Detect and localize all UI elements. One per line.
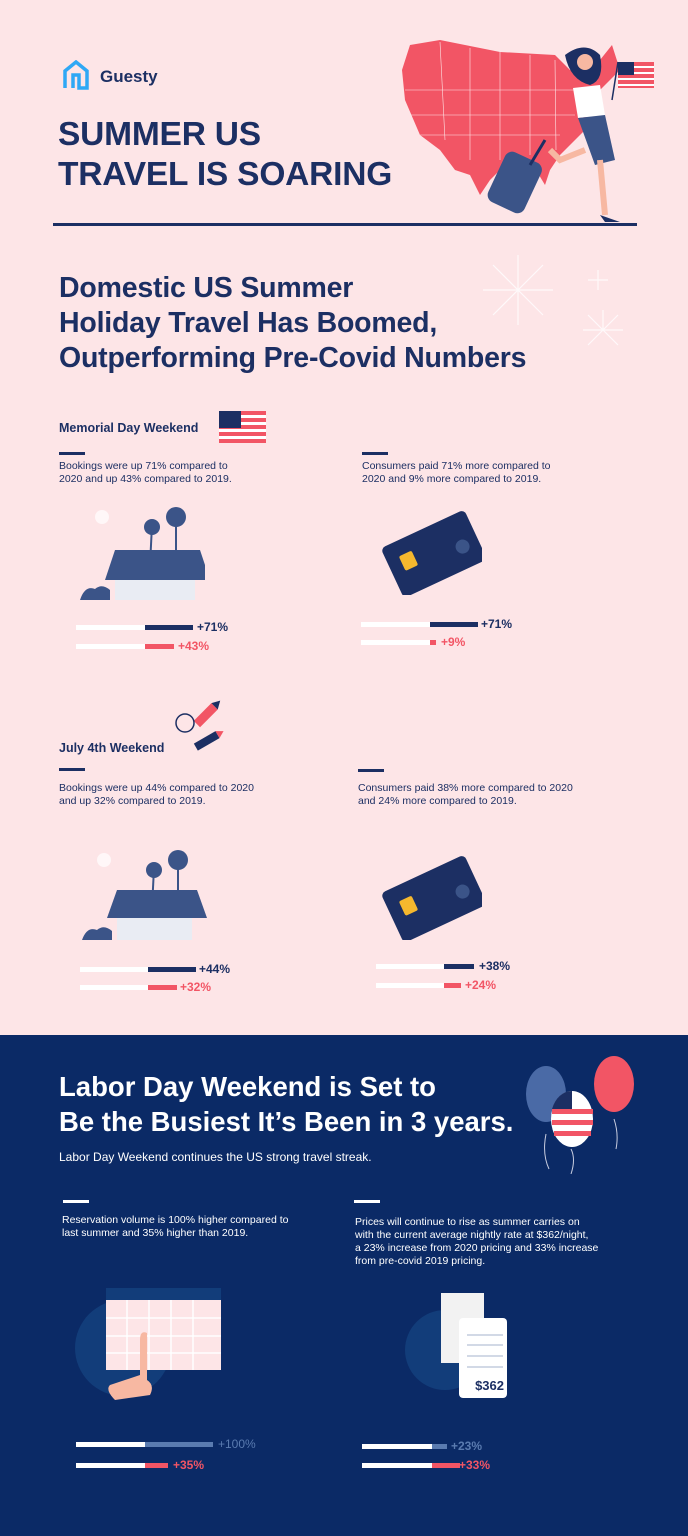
memorial text right: 2020 and 9% more compared to 2019. — [362, 473, 541, 485]
icon: US flag — [219, 411, 266, 443]
bars: labor prices: +23% — [451, 1439, 482, 1453]
bars: labor reservations: +100% — [218, 1437, 256, 1451]
labor text right: Prices will continue to rise as summer carries on — [355, 1216, 580, 1228]
labor text left: last summer and 35% higher than 2019. — [62, 1227, 248, 1239]
memorial text left: Bookings were up 71% compared to — [59, 460, 228, 472]
icon: credit card (memorial) — [382, 511, 482, 595]
illustration: US map with traveler — [402, 40, 654, 222]
icon: house with palms (memorial) — [80, 507, 205, 600]
title — [58, 116, 392, 193]
logo — [63, 60, 158, 90]
bars: july bookings: +44% — [199, 962, 230, 976]
icon: fireworks rockets — [175, 700, 224, 751]
icon: credit card (july) — [382, 856, 482, 940]
labor day heading: Be the Busiest It’s Been in 3 years. — [59, 1106, 513, 1137]
memorial text right — [362, 460, 551, 485]
labor text right: from pre-covid 2019 pricing. — [355, 1255, 485, 1267]
icon: calendar with hand — [75, 1288, 221, 1400]
july text left: Bookings were up 44% compared to 2020 — [59, 782, 254, 794]
logo: Guesty — [100, 67, 158, 86]
bars: memorial bookings: +43% — [178, 639, 209, 653]
bars: july bookings: +32% — [180, 980, 211, 994]
memorial text left: 2020 and up 43% compared to 2019. — [59, 473, 232, 485]
bars: labor prices: +33% — [459, 1458, 490, 1472]
bars: memorial prices: +71% — [481, 617, 512, 631]
memorial text left — [59, 460, 232, 485]
labor text right: with the current average nightly rate at $362/night, — [355, 1229, 588, 1241]
section heading: Holiday Travel Has Boomed, — [59, 307, 437, 339]
bars: memorial prices — [361, 617, 512, 649]
section heading: Domestic US Summer — [59, 272, 353, 304]
bars: memorial prices: +9% — [441, 635, 465, 649]
labor text right — [355, 1216, 598, 1267]
july text left — [59, 782, 254, 807]
header divider — [53, 223, 637, 226]
bars: memorial bookings: +71% — [197, 620, 228, 634]
traveler — [565, 48, 601, 85]
section heading — [59, 272, 526, 374]
labor text left: Reservation volume is 100% higher compared to — [62, 1214, 288, 1226]
memorial text right: Consumers paid 71% more compared to — [362, 460, 551, 472]
dark section background — [0, 1035, 688, 1536]
icon: receipt $362: $362 — [475, 1378, 504, 1393]
bars: labor reservations: +35% — [173, 1458, 204, 1472]
bars: july prices: +24% — [465, 978, 496, 992]
july 4th heading: July 4th Weekend — [59, 741, 164, 755]
labor day heading: Labor Day Weekend is Set to — [59, 1071, 436, 1102]
bars: labor reservations — [76, 1437, 256, 1472]
labor text left — [62, 1214, 288, 1239]
july text right: and 24% more compared to 2019. — [358, 795, 517, 807]
labor day heading — [59, 1071, 513, 1137]
bars: july prices: +38% — [479, 959, 510, 973]
bars: july bookings — [80, 962, 230, 994]
memorial day heading: Memorial Day Weekend — [59, 421, 198, 435]
title: SUMMER US — [58, 116, 261, 153]
title: TRAVEL IS SOARING — [58, 156, 392, 193]
july text left: and up 32% compared to 2019. — [59, 795, 206, 807]
icon: house with palms (july) — [82, 850, 207, 940]
section heading: Outperforming Pre-Covid Numbers — [59, 342, 526, 374]
icon: receipt $362 — [405, 1293, 507, 1398]
bars: july prices — [376, 959, 510, 992]
bars: labor prices — [362, 1439, 490, 1472]
icon: balloons — [526, 1056, 634, 1174]
labor day subtitle: Labor Day Weekend continues the US strong travel streak. — [59, 1150, 372, 1164]
july text right: Consumers paid 38% more compared to 2020 — [358, 782, 573, 794]
labor text right: a 23% increase from 2020 pricing and 33% increase — [355, 1242, 598, 1254]
decorative fireworks — [483, 255, 623, 346]
july text right — [358, 782, 573, 807]
bars: memorial bookings — [76, 620, 228, 653]
